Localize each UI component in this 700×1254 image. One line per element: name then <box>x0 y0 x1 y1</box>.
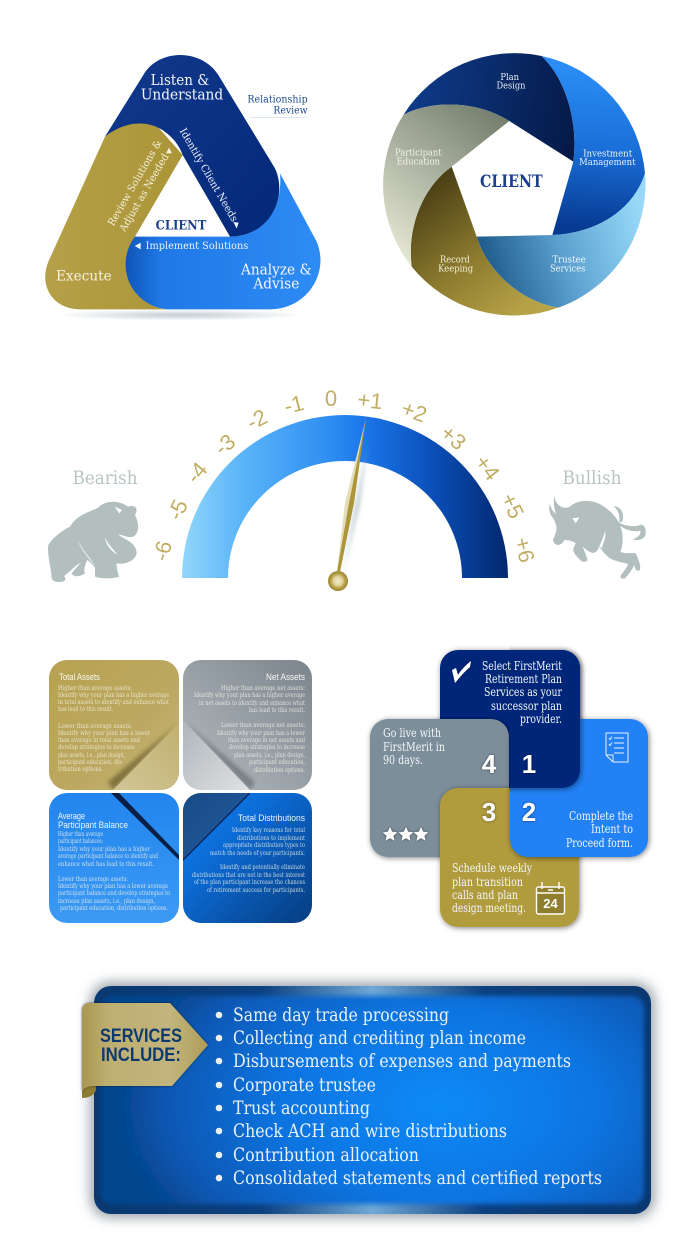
label: analyze and advise <box>240 261 312 292</box>
gauge: bearish to bullish sentiment <box>148 386 540 591</box>
label: relationship review: Review <box>273 104 308 116</box>
text: total distributions body: Identify and potentially eliminate <box>220 864 305 871</box>
step 1 text: Services as your <box>484 685 562 699</box>
icon: checklist document <box>606 733 628 762</box>
wheel label: participant education: Education <box>397 158 440 168</box>
step 3 text: calls and plan <box>452 888 518 902</box>
step 1 text <box>482 659 562 726</box>
ribbon text: INCLUDE: <box>101 1045 181 1066</box>
wheel label: plan design: Design <box>496 82 526 92</box>
segment: participant education <box>383 104 509 267</box>
text: total distributions body: of the plan participant increase the chances <box>194 879 305 886</box>
label: listen and understand <box>141 72 223 103</box>
heading: average participant balance <box>58 811 128 831</box>
text: net assets body: than average in net assets and <box>228 737 305 744</box>
panel: total assets <box>49 660 179 790</box>
wheel label: trustee services <box>550 256 586 274</box>
panel background <box>49 793 179 923</box>
text: average participant balance body: Identify why your plan has a higher <box>58 846 150 853</box>
icon: calendar: 24 <box>543 896 558 911</box>
text: net assets body: Identify why your plan has a higher average <box>194 692 305 699</box>
wheel label: investment management <box>579 149 636 168</box>
card: step 4 <box>370 719 509 857</box>
diagram: four step pinwheel <box>370 650 648 927</box>
label: listen and understand: Understand <box>141 86 223 103</box>
icon: calendar <box>536 882 564 914</box>
text: average participant balance body: participant balance and develop strategies to <box>58 890 170 897</box>
label: analyze and advise: Analyze & <box>240 261 312 278</box>
text: total distributions body: appropriate distribution types to <box>223 842 305 849</box>
step numbers: 2 <box>522 797 536 827</box>
segment: record keeping <box>411 167 558 316</box>
label: execute: Execute <box>56 269 112 285</box>
text: total assets body: tribution options. <box>58 766 103 773</box>
step 1 text: Select FirstMerit <box>482 659 562 673</box>
label: client: CLIENT <box>156 217 206 233</box>
text: total distributions body: Identify key reasons for total <box>232 827 305 834</box>
label: bullish: Bullish <box>562 467 622 489</box>
text: net assets body: has lead to this result. <box>249 707 305 714</box>
fold: net assets <box>183 720 255 790</box>
wheel label: plan design <box>496 73 526 92</box>
step 2 text: Intent to <box>591 822 633 836</box>
diagram: client services wheel <box>383 53 645 316</box>
segment: listen and understand <box>105 55 279 237</box>
needle hub <box>328 571 348 591</box>
step 1 text: successor plan <box>491 699 562 713</box>
card: step 2 <box>510 719 648 857</box>
step 4 text: 90 days. <box>383 753 423 767</box>
step 3 text: design meeting. <box>452 901 526 915</box>
wheel label: investment management: Investment <box>583 149 633 159</box>
fold: average participant balance <box>111 793 179 860</box>
text: total assets body: Lower than average assets: <box>58 723 132 730</box>
label: implement solutions: Implement Solutions <box>146 241 248 252</box>
panel shadow <box>90 982 655 1218</box>
gauge scale labels: -6 <box>148 538 177 564</box>
step 2 text: Proceed form. <box>566 836 633 850</box>
text: total assets body: Identify why your plan has a higher average <box>58 692 169 699</box>
panel background <box>183 793 312 923</box>
text: total distributions body: distributions to implement <box>237 835 305 842</box>
triangle ground shadow <box>53 309 307 321</box>
gauge scale labels: -2 <box>242 404 271 435</box>
needle shadow <box>343 440 368 572</box>
segment: investment management <box>542 56 645 235</box>
icon: bear <box>48 502 138 582</box>
panel background <box>49 660 179 790</box>
ribbon text: SERVICES <box>100 1026 182 1047</box>
text: average participant balance body: participant education, distribution options. <box>60 905 168 912</box>
panel: services include <box>82 982 655 1218</box>
icon: bull <box>549 496 646 579</box>
step 4 text: Go live with <box>383 726 441 740</box>
wheel label: participant education: Participant <box>395 149 442 159</box>
text: net assets body: develop strategies to increase <box>229 744 305 751</box>
text: average participant balance body: Identify why your plan has a lower average <box>58 883 168 890</box>
fold: total assets <box>108 723 179 790</box>
text: total assets body: than average in total assets and <box>58 737 140 744</box>
text: average participant balance body: Lower than average assets: <box>58 876 128 883</box>
gauge scale labels: 0 <box>325 386 337 411</box>
gauge scale labels: +6 <box>509 535 540 565</box>
ribbon: services include <box>82 1003 208 1094</box>
step 4 text <box>383 726 445 767</box>
panel: total distributions <box>183 793 312 923</box>
text: total assets body <box>58 685 169 773</box>
segment: execute <box>45 107 183 309</box>
label: review solutions: Review Solutions & <box>106 138 165 228</box>
text: net assets body <box>194 685 305 774</box>
step 3 text <box>452 861 532 915</box>
text: net assets body: participant education, <box>249 759 305 766</box>
wheel label: plan design: Plan <box>500 73 519 83</box>
label: relationship review <box>247 93 308 118</box>
text: net assets body: Identify why your plan has a lower <box>217 730 305 737</box>
text: average participant balance body <box>58 831 170 912</box>
wheel label: record keeping <box>438 256 473 274</box>
wheel label: client: CLIENT <box>480 171 543 191</box>
gauge scale labels: -5 <box>162 496 193 524</box>
text: total assets body: has lead to this result. <box>58 706 113 713</box>
list items: Trust accounting <box>233 1098 370 1119</box>
gauge scale labels: -4 <box>181 457 212 488</box>
text: average participant balance body: increase plan assets, i.e., plan design, <box>58 898 155 905</box>
text: total distributions body: of retirement success for participants. <box>207 887 305 894</box>
panel: average participant balance <box>49 793 179 923</box>
wheel label: trustee services: Services <box>550 264 586 274</box>
list items: Corporate trustee <box>233 1075 376 1096</box>
panel background <box>183 660 312 790</box>
list items: Contribution allocation <box>233 1145 419 1166</box>
step numbers: 4 <box>482 749 497 779</box>
step 1 text: Retirement Plan <box>485 672 562 686</box>
heading: average participant balance: Average <box>58 811 85 822</box>
text: total assets body: Identify why your plan has a lower <box>58 730 150 737</box>
wheel label: trustee services: Trustee <box>552 256 586 266</box>
gauge scale labels: +3 <box>436 420 471 455</box>
label: analyze and advise: Advise <box>252 275 299 292</box>
gauge scale labels <box>148 386 540 565</box>
text: total assets body: develop strategies to increase <box>58 744 135 751</box>
text: total assets body: participant education, dis- <box>58 759 123 766</box>
step numbers: 3 <box>482 797 496 827</box>
gauge scale labels: -3 <box>209 429 240 460</box>
icon: stars <box>383 827 428 841</box>
text: net assets body: distribution options. <box>254 767 305 774</box>
heading: total assets: Total Assets <box>59 672 100 683</box>
list items: Same day trade processing <box>233 1005 449 1026</box>
text: net assets body: Lower than average net assets: <box>221 722 305 729</box>
gauge arc <box>182 415 508 578</box>
ribbon text <box>100 1026 182 1066</box>
gauge scale labels: -1 <box>281 390 306 419</box>
wheel label: investment management: Management <box>579 158 636 168</box>
label: bearish: Bearish <box>72 467 138 489</box>
list items <box>233 1005 602 1189</box>
services list <box>216 1005 602 1189</box>
step 1 text: provider. <box>520 712 562 726</box>
text: total distributions body: match the needs of your participants. <box>210 850 305 857</box>
label: listen and understand: Listen & <box>151 72 209 89</box>
text: total assets body: Higher than average assets: <box>58 685 132 692</box>
gauge scale labels: +2 <box>398 395 430 428</box>
fold: total distributions <box>183 793 250 860</box>
label: review solutions: Adjust as Needed <box>117 151 172 235</box>
list items: Collecting and crediting plan income <box>233 1028 526 1049</box>
wheel label: record keeping: Keeping <box>438 264 473 274</box>
segment: trustee services <box>477 173 645 308</box>
segment: plan design <box>403 53 574 162</box>
list items: Consolidated statements and certified reports <box>233 1168 602 1189</box>
step 3 text: Schedule weekly <box>452 861 532 875</box>
label: relationship review: Relationship <box>247 93 308 105</box>
text: total assets body: in total assets to identify and enhance what <box>58 699 169 706</box>
text: total distributions body: distributions that are not in the best interest <box>192 872 305 879</box>
card: step 1 overlap <box>510 647 585 793</box>
step 2 text <box>566 809 633 850</box>
text: net assets body: in net assets to identify and enhance what <box>199 700 305 707</box>
panel interior <box>101 996 644 1204</box>
text: total distributions body <box>192 827 305 894</box>
list items: Check ACH and wire distributions <box>233 1121 507 1142</box>
wheel label: participant education <box>395 149 442 168</box>
heading: net assets: Net Assets <box>266 672 305 683</box>
heading: average participant balance: Participant Balance <box>58 820 128 831</box>
step numbers <box>482 749 536 827</box>
list bullets <box>216 1012 222 1181</box>
gauge scale labels: +1 <box>356 387 384 414</box>
step 4 text: FirstMerit in <box>383 740 445 754</box>
gauge scale labels: +4 <box>470 450 505 485</box>
step 2 text: Complete the <box>569 809 633 823</box>
gauge scale labels: +5 <box>496 489 529 522</box>
text: average participant balance body: participant balances: <box>58 838 103 845</box>
text: total assets body: plan assets, i.e., plan design, <box>58 752 125 759</box>
diagram: client service triangle <box>45 55 320 321</box>
panel: net assets <box>183 660 312 790</box>
step 3 text: plan transition <box>452 875 523 889</box>
text: net assets body: Higher than average net assets: <box>221 685 305 692</box>
step numbers: 1 <box>522 749 536 779</box>
text: net assets body: plan assets, i.e., plan design, <box>234 752 305 759</box>
text: average participant balance body: enhance what has lead to this result. <box>58 861 154 868</box>
heading: total distributions: Total Distributions <box>238 813 305 824</box>
icon: check mark <box>452 661 471 683</box>
label: identify client needs: Identify Client Needs <box>177 126 240 224</box>
ribbon curl <box>82 1084 96 1098</box>
card: step 1 base <box>440 650 580 788</box>
text: average participant balance body: Higher than average <box>58 831 103 838</box>
wheel label: record keeping: Record <box>440 256 470 266</box>
card: step 3 <box>440 788 579 927</box>
list items: Disbursements of expenses and payments <box>233 1051 571 1072</box>
text: average participant balance body: average participant balance to identify and <box>58 853 158 860</box>
panel frame <box>94 986 651 1214</box>
segment: analyze and advise <box>126 173 320 309</box>
gauge needle <box>337 418 366 572</box>
